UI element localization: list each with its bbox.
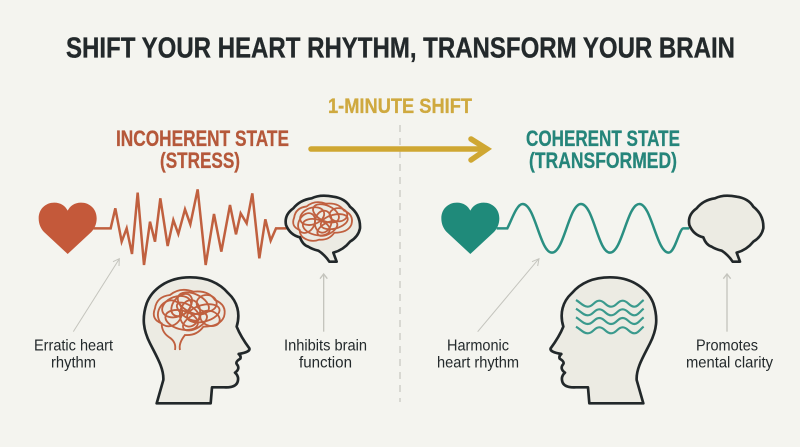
heading: incoherent state — [116, 126, 289, 173]
label: harmonic heart rhythm: heart rhythm — [437, 354, 519, 372]
label: inhibits brain function: function — [299, 354, 352, 372]
label: erratic heart rhythm — [34, 338, 114, 372]
arrow: to rhythm — [73, 259, 119, 332]
chart: erratic rhythm line — [93, 189, 287, 265]
icon: calm brain — [689, 196, 763, 262]
shift label: 1-MINUTE SHIFT — [328, 95, 472, 118]
heading: incoherent state: (STRESS) — [160, 148, 240, 173]
label: harmonic heart rhythm: Harmonic — [447, 338, 509, 354]
heading: incoherent state: INCOHERENT STATE — [116, 126, 289, 151]
panel: incoherent state — [39, 189, 360, 403]
icon: head with tangled brain — [144, 277, 249, 403]
arrow: to calm brain — [723, 274, 731, 332]
icon: head with calm waves — [551, 277, 656, 403]
icon: harmonic heart — [441, 203, 499, 254]
heading: coherent state: (TRANSFORMED) — [529, 148, 677, 173]
icon: erratic heart — [39, 203, 97, 254]
panel: coherent state — [441, 196, 763, 403]
label: inhibits brain function — [284, 338, 367, 372]
label: inhibits brain function: Inhibits brain — [284, 338, 367, 354]
arrow: to brain — [320, 274, 327, 332]
icon: tangled brain — [286, 196, 360, 262]
label: harmonic heart rhythm — [437, 338, 519, 372]
chart: harmonic rhythm wave — [497, 204, 689, 253]
heading: coherent state — [526, 126, 680, 173]
label: erratic heart rhythm: Erratic heart — [34, 338, 114, 354]
label: erratic heart rhythm: rhythm — [51, 354, 96, 372]
label: promotes mental clarity — [686, 338, 773, 372]
heading: coherent state: COHERENT STATE — [526, 126, 680, 151]
arrow: shift — [311, 139, 487, 160]
label: promotes mental clarity: mental clarity — [686, 354, 773, 372]
arrow: to wave — [478, 259, 539, 332]
label: promotes mental clarity: Promotes — [696, 338, 758, 354]
